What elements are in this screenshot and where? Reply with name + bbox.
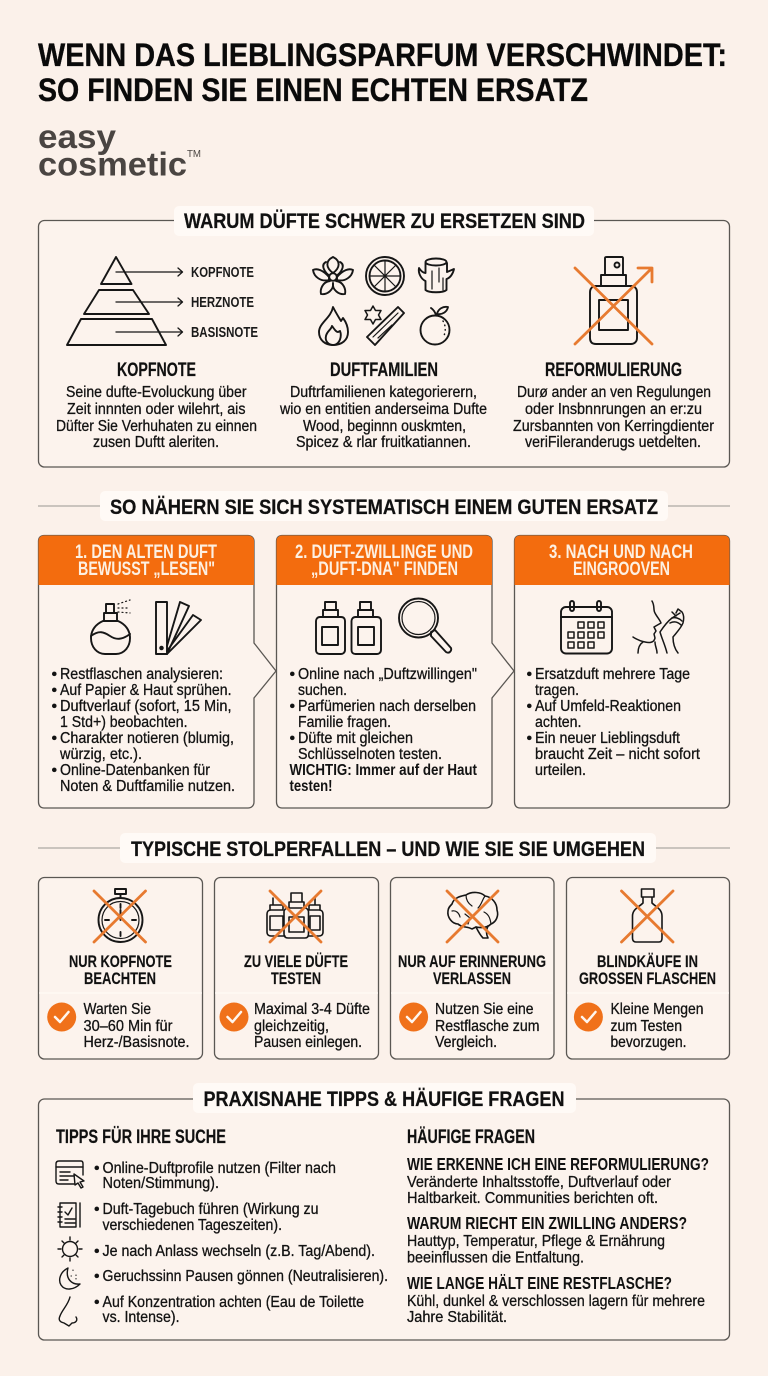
list: schritt 1: Duftverlauf (sofort, 15 Min, bbox=[60, 698, 232, 715]
list: schritt 2: testen! bbox=[290, 778, 332, 795]
label: NUR AUF ERINNERUNG bbox=[398, 953, 546, 971]
tip: gleichzeitig, bbox=[254, 1018, 329, 1035]
heading: so nähern sie sich: SO NÄHERN SIE SICH SYSTEMATISCH EINEM GUTEN ERSATZ bbox=[110, 495, 658, 519]
faq 2: beeinflussen die Entfaltung. bbox=[407, 1250, 584, 1266]
step heading 1 bbox=[75, 542, 217, 580]
text block: kopfnote bbox=[56, 360, 257, 451]
text block: reformulierung: REFORMULIERUNG bbox=[545, 360, 682, 381]
text block: reformulierung: oder Insbnnrungen an er:zu bbox=[525, 401, 702, 418]
tip: zum Testen bbox=[610, 1018, 682, 1035]
icon: sonne bbox=[58, 1237, 82, 1261]
tip: Warten Sie bbox=[84, 1001, 151, 1018]
tip 1: Noten/Stimmung). bbox=[102, 1175, 219, 1192]
list: schritt 3: • bbox=[526, 730, 532, 747]
title bbox=[38, 37, 727, 108]
list: schritt 1: 1 Std+) beobachten. bbox=[60, 714, 188, 731]
faq 1: Veränderte Inhaltsstoffe, Duftverlauf oder bbox=[407, 1174, 672, 1191]
text block: reformulierung bbox=[513, 360, 715, 451]
icon: browser mit mauszeiger bbox=[56, 1161, 84, 1188]
text block: reformulierung: Zursbannten von Kerringdienter bbox=[513, 418, 715, 435]
list: schritt 3: Auf Umfeld-Reaktionen bbox=[535, 698, 681, 715]
tip 2 bbox=[94, 1201, 318, 1234]
list: schritt 3 bbox=[526, 666, 701, 779]
text block: duftfamilien bbox=[279, 360, 487, 451]
text block: kopfnote: Seine dufte-Evoluckung über bbox=[66, 384, 247, 401]
list: schritt 2: • bbox=[290, 666, 295, 683]
list: schritt 2: • bbox=[290, 730, 295, 747]
column heading: tipps: TIPPS FÜR IHRE SUCHE bbox=[56, 1127, 226, 1148]
faq 2: Hauttyp, Temperatur, Pflege & Ernährung bbox=[407, 1233, 665, 1250]
text block: duftfamilien: Spicez & rlar fruitkatiannen. bbox=[296, 434, 471, 451]
list: schritt 1: Online-Datenbanken für bbox=[60, 762, 211, 779]
list: schritt 3: • bbox=[526, 698, 532, 715]
list: schritt 1: Auf Papier & Haut sprühen. bbox=[60, 682, 232, 699]
list: schritt 3: Ein neuer Lieblingsduft bbox=[535, 730, 680, 747]
logo: easy cosmetic: TM bbox=[187, 149, 201, 160]
list: schritt 1 bbox=[52, 666, 235, 795]
tip bbox=[435, 1001, 540, 1051]
icon: nase bbox=[59, 1297, 77, 1326]
label: TESTEN bbox=[271, 970, 321, 988]
heading: typische stolperfallen bbox=[120, 833, 656, 863]
tip: Nutzen Sie eine bbox=[435, 1001, 534, 1018]
label: VERLASSEN bbox=[433, 970, 511, 988]
panel: praxisnahe tipps und häufige fragen bbox=[38, 1083, 730, 1340]
icon: zimtstange und stern bbox=[365, 306, 404, 345]
list: schritt 1: • bbox=[52, 730, 57, 747]
step heading 3: 3. NACH UND NACH bbox=[549, 542, 693, 563]
label: BLINDKÄUFE IN bbox=[597, 953, 698, 971]
tip: 30–60 Min für bbox=[84, 1018, 173, 1035]
icon: blume bbox=[313, 257, 353, 294]
list: schritt 1: • bbox=[52, 762, 57, 779]
step heading 1: 1. DEN ALTEN DUFT bbox=[75, 542, 217, 563]
step heading 2: 2. DUFT-ZWILLINGE UND bbox=[295, 542, 473, 563]
icon: duftpyramide: KOPFNOTE bbox=[191, 265, 254, 281]
tip: Pausen einlegen. bbox=[254, 1034, 362, 1051]
logo: easy cosmetic: cosmetic bbox=[38, 146, 187, 182]
tip 4: Geruchssinn Pausen gönnen (Neutralisieren). bbox=[102, 1268, 388, 1285]
faq 3: Kühl, dunkel & verschlossen lagern für mehrere bbox=[407, 1293, 705, 1310]
tip 2: • bbox=[94, 1201, 100, 1218]
tip 1 bbox=[94, 1160, 336, 1192]
list: schritt 2: Düfte mit gleichen bbox=[298, 730, 413, 747]
tip bbox=[254, 1001, 370, 1051]
list: schritt 2: Parfümerien nach derselben bbox=[298, 698, 476, 715]
icon: mond bbox=[60, 1268, 80, 1289]
label bbox=[69, 953, 172, 988]
list: schritt 1: • bbox=[52, 666, 57, 683]
tip 1: Online-Duftprofile nutzen (Filter nach bbox=[102, 1160, 336, 1177]
icon: duftstreifen bbox=[156, 602, 201, 654]
tip 5: Auf Konzentration achten (Eau de Toilette bbox=[102, 1294, 364, 1311]
faq 2 bbox=[407, 1213, 687, 1266]
panel: schritt 2 bbox=[276, 536, 514, 808]
text block: reformulierung: veriFileranderugs uetdelten. bbox=[525, 434, 701, 451]
label: ZU VIELE DÜFTE bbox=[244, 952, 348, 971]
tip: Maximal 3-4 Düfte bbox=[254, 1001, 370, 1018]
icon: reformulierung flakon bbox=[575, 257, 652, 344]
faq 3 bbox=[407, 1273, 705, 1326]
icon: duftpyramide: HERZNOTE bbox=[191, 295, 254, 311]
text block: reformulierung: Durø ander an ven Regulungen bbox=[517, 384, 711, 401]
logo: easy cosmetic bbox=[38, 118, 201, 182]
tip 3: • bbox=[94, 1243, 100, 1260]
icon: gesicht riecht am handgelenk bbox=[633, 601, 684, 653]
tip 5 bbox=[94, 1294, 364, 1326]
label: GROSSEN FLASCHEN bbox=[579, 970, 716, 988]
tip bbox=[610, 1001, 704, 1051]
tip: Restflasche zum bbox=[435, 1018, 540, 1035]
icon: häkchen bbox=[220, 1002, 248, 1032]
icon: kalender bbox=[561, 601, 612, 654]
panel: schritt 1 bbox=[38, 536, 276, 808]
tip: bevorzugen. bbox=[610, 1034, 686, 1051]
list: schritt 2: Online nach „Duftzwillingen" bbox=[298, 666, 477, 683]
list: schritt 3: braucht Zeit – nicht sofort bbox=[535, 746, 701, 763]
step heading 1: BEWUSST „LESEN" bbox=[78, 559, 215, 580]
tip: Kleine Mengen bbox=[610, 1001, 704, 1018]
tip 5: vs. Intense). bbox=[102, 1309, 180, 1326]
label: BEACHTEN bbox=[84, 970, 156, 988]
panel: warum düfte schwer zu ersetzen sind bbox=[38, 206, 730, 467]
icon: grosse flasche durchgestrichen bbox=[622, 889, 673, 942]
faq 3: WIE LANGE HÄLT EINE RESTFLASCHE? bbox=[407, 1273, 672, 1293]
title: SO FINDEN SIE EINEN ECHTEN ERSATZ bbox=[38, 72, 588, 108]
text block: kopfnote: Düfter Sie Verhuhaten zu einnen bbox=[56, 418, 257, 435]
heading: so nähern sie sich bbox=[100, 491, 668, 521]
step heading 3: EINGROOVEN bbox=[573, 559, 670, 580]
heading: typische stolperfallen: TYPISCHE STOLPERFALLEN – UND WIE SIE SIE UMGEHEN bbox=[131, 837, 645, 861]
tip 1: • bbox=[94, 1160, 100, 1177]
icon: drei flakons durchgestrichen bbox=[267, 891, 323, 942]
tip 4: • bbox=[94, 1268, 100, 1285]
icon: häkchen bbox=[399, 1002, 428, 1032]
step heading 2 bbox=[295, 542, 473, 580]
heading: praxisnahe tipps: PRAXISNAHE TIPPS & HÄUFIGE FRAGEN bbox=[204, 1087, 564, 1111]
list: schritt 1: • bbox=[52, 682, 57, 699]
icon: stoppuhr durchgestrichen bbox=[94, 889, 146, 942]
panel: stolperfalle blindkäufe bbox=[566, 878, 730, 1059]
tip 3: Je nach Anlass wechseln (z.B. Tag/Abend). bbox=[102, 1243, 375, 1260]
text block: duftfamilien: DUFTFAMILIEN bbox=[330, 360, 438, 381]
icon: zwei flakons bbox=[316, 602, 381, 654]
list: schritt 2 bbox=[290, 666, 478, 795]
tip: Vergleich. bbox=[435, 1034, 497, 1051]
list: schritt 1: Noten & Duftfamilie nutzen. bbox=[60, 778, 235, 795]
icon: orange bbox=[420, 307, 450, 344]
faq 1: Haltbarkeit. Communities berichten oft. bbox=[407, 1190, 658, 1207]
tip 2: Duft-Tagebuch führen (Wirkung zu bbox=[102, 1201, 318, 1218]
list: schritt 3: urteilen. bbox=[535, 762, 586, 779]
list: schritt 1: würzig, etc.). bbox=[59, 746, 142, 763]
list: schritt 3: • bbox=[526, 666, 532, 683]
icon: zitrusscheibe bbox=[366, 257, 404, 295]
list: schritt 3: achten. bbox=[535, 714, 582, 731]
faq 3: Jahre Stabilität. bbox=[407, 1309, 507, 1326]
list: schritt 2: Familie fragen. bbox=[298, 714, 391, 731]
column heading: häufige fragen: HÄUFIGE FRAGEN bbox=[407, 1127, 535, 1148]
text block: duftfamilien: wio en entitien anderseima Dufte bbox=[279, 401, 487, 418]
list: schritt 2: WICHTIG: Immer auf der Haut bbox=[290, 762, 478, 779]
label bbox=[244, 952, 348, 988]
icon: flamme bbox=[319, 307, 348, 345]
list: schritt 2: • bbox=[290, 698, 295, 715]
step heading 2: „DUFT-DNA" FINDEN bbox=[311, 559, 458, 580]
text block: kopfnote: zusen Duftt aleriten. bbox=[93, 434, 219, 451]
text block: duftfamilien: Duftrfamilienen kategorierern, bbox=[290, 384, 477, 401]
logo: easy cosmetic: easy bbox=[38, 118, 117, 155]
icon: holzstamm bbox=[419, 258, 454, 292]
list: schritt 1: • bbox=[52, 698, 57, 715]
panel: schritt 3 bbox=[514, 536, 730, 808]
label bbox=[398, 953, 546, 988]
icon: duftpyramide: BASISNOTE bbox=[191, 325, 258, 341]
icon: gehirn durchgestrichen bbox=[447, 891, 498, 942]
list: schritt 2: Schlüsselnoten testen. bbox=[298, 746, 442, 763]
faq 2: WARUM RIECHT EIN ZWILLING ANDERS? bbox=[407, 1213, 687, 1233]
text block: kopfnote: KOPFNOTE bbox=[117, 360, 196, 381]
icon: häkchen bbox=[574, 1002, 603, 1032]
icon: parfumflakon bbox=[91, 600, 130, 654]
icon: duftpyramide bbox=[67, 257, 258, 345]
panel: stolperfalle kopfnote bbox=[38, 878, 202, 1059]
step heading 3 bbox=[549, 542, 693, 580]
tip 5: • bbox=[94, 1294, 100, 1311]
panel: stolperfalle erinnerung bbox=[390, 878, 554, 1059]
icon: lupe bbox=[399, 598, 451, 653]
list: schritt 1: Charakter notieren (blumig, bbox=[60, 730, 234, 747]
text block: kopfnote: Zeit innnten oder wilehrt, ais bbox=[67, 401, 246, 418]
text block: duftfamilien: Wood, beginnn ouskmten, bbox=[303, 418, 466, 435]
tip: Herz-/Basisnote. bbox=[84, 1034, 190, 1051]
tip bbox=[84, 1001, 190, 1051]
label: NUR KOPFNOTE bbox=[69, 953, 172, 971]
faq 1 bbox=[407, 1154, 709, 1207]
icon: notizbuch bbox=[58, 1203, 80, 1227]
label bbox=[579, 953, 716, 988]
list: schritt 2: suchen. bbox=[298, 682, 347, 699]
heading: warum düfte: WARUM DÜFTE SCHWER ZU ERSETZEN SIND bbox=[184, 208, 585, 233]
icon: häkchen bbox=[47, 1002, 76, 1032]
list: schritt 3: tragen. bbox=[535, 682, 579, 699]
list: schritt 3: Ersatzduft mehrere Tage bbox=[535, 666, 690, 683]
tip 2: verschiedenen Tageszeiten). bbox=[102, 1217, 282, 1234]
list: schritt 1: Restflaschen analysieren: bbox=[60, 666, 223, 683]
panel: stolperfalle zu viele düfte bbox=[214, 878, 378, 1059]
